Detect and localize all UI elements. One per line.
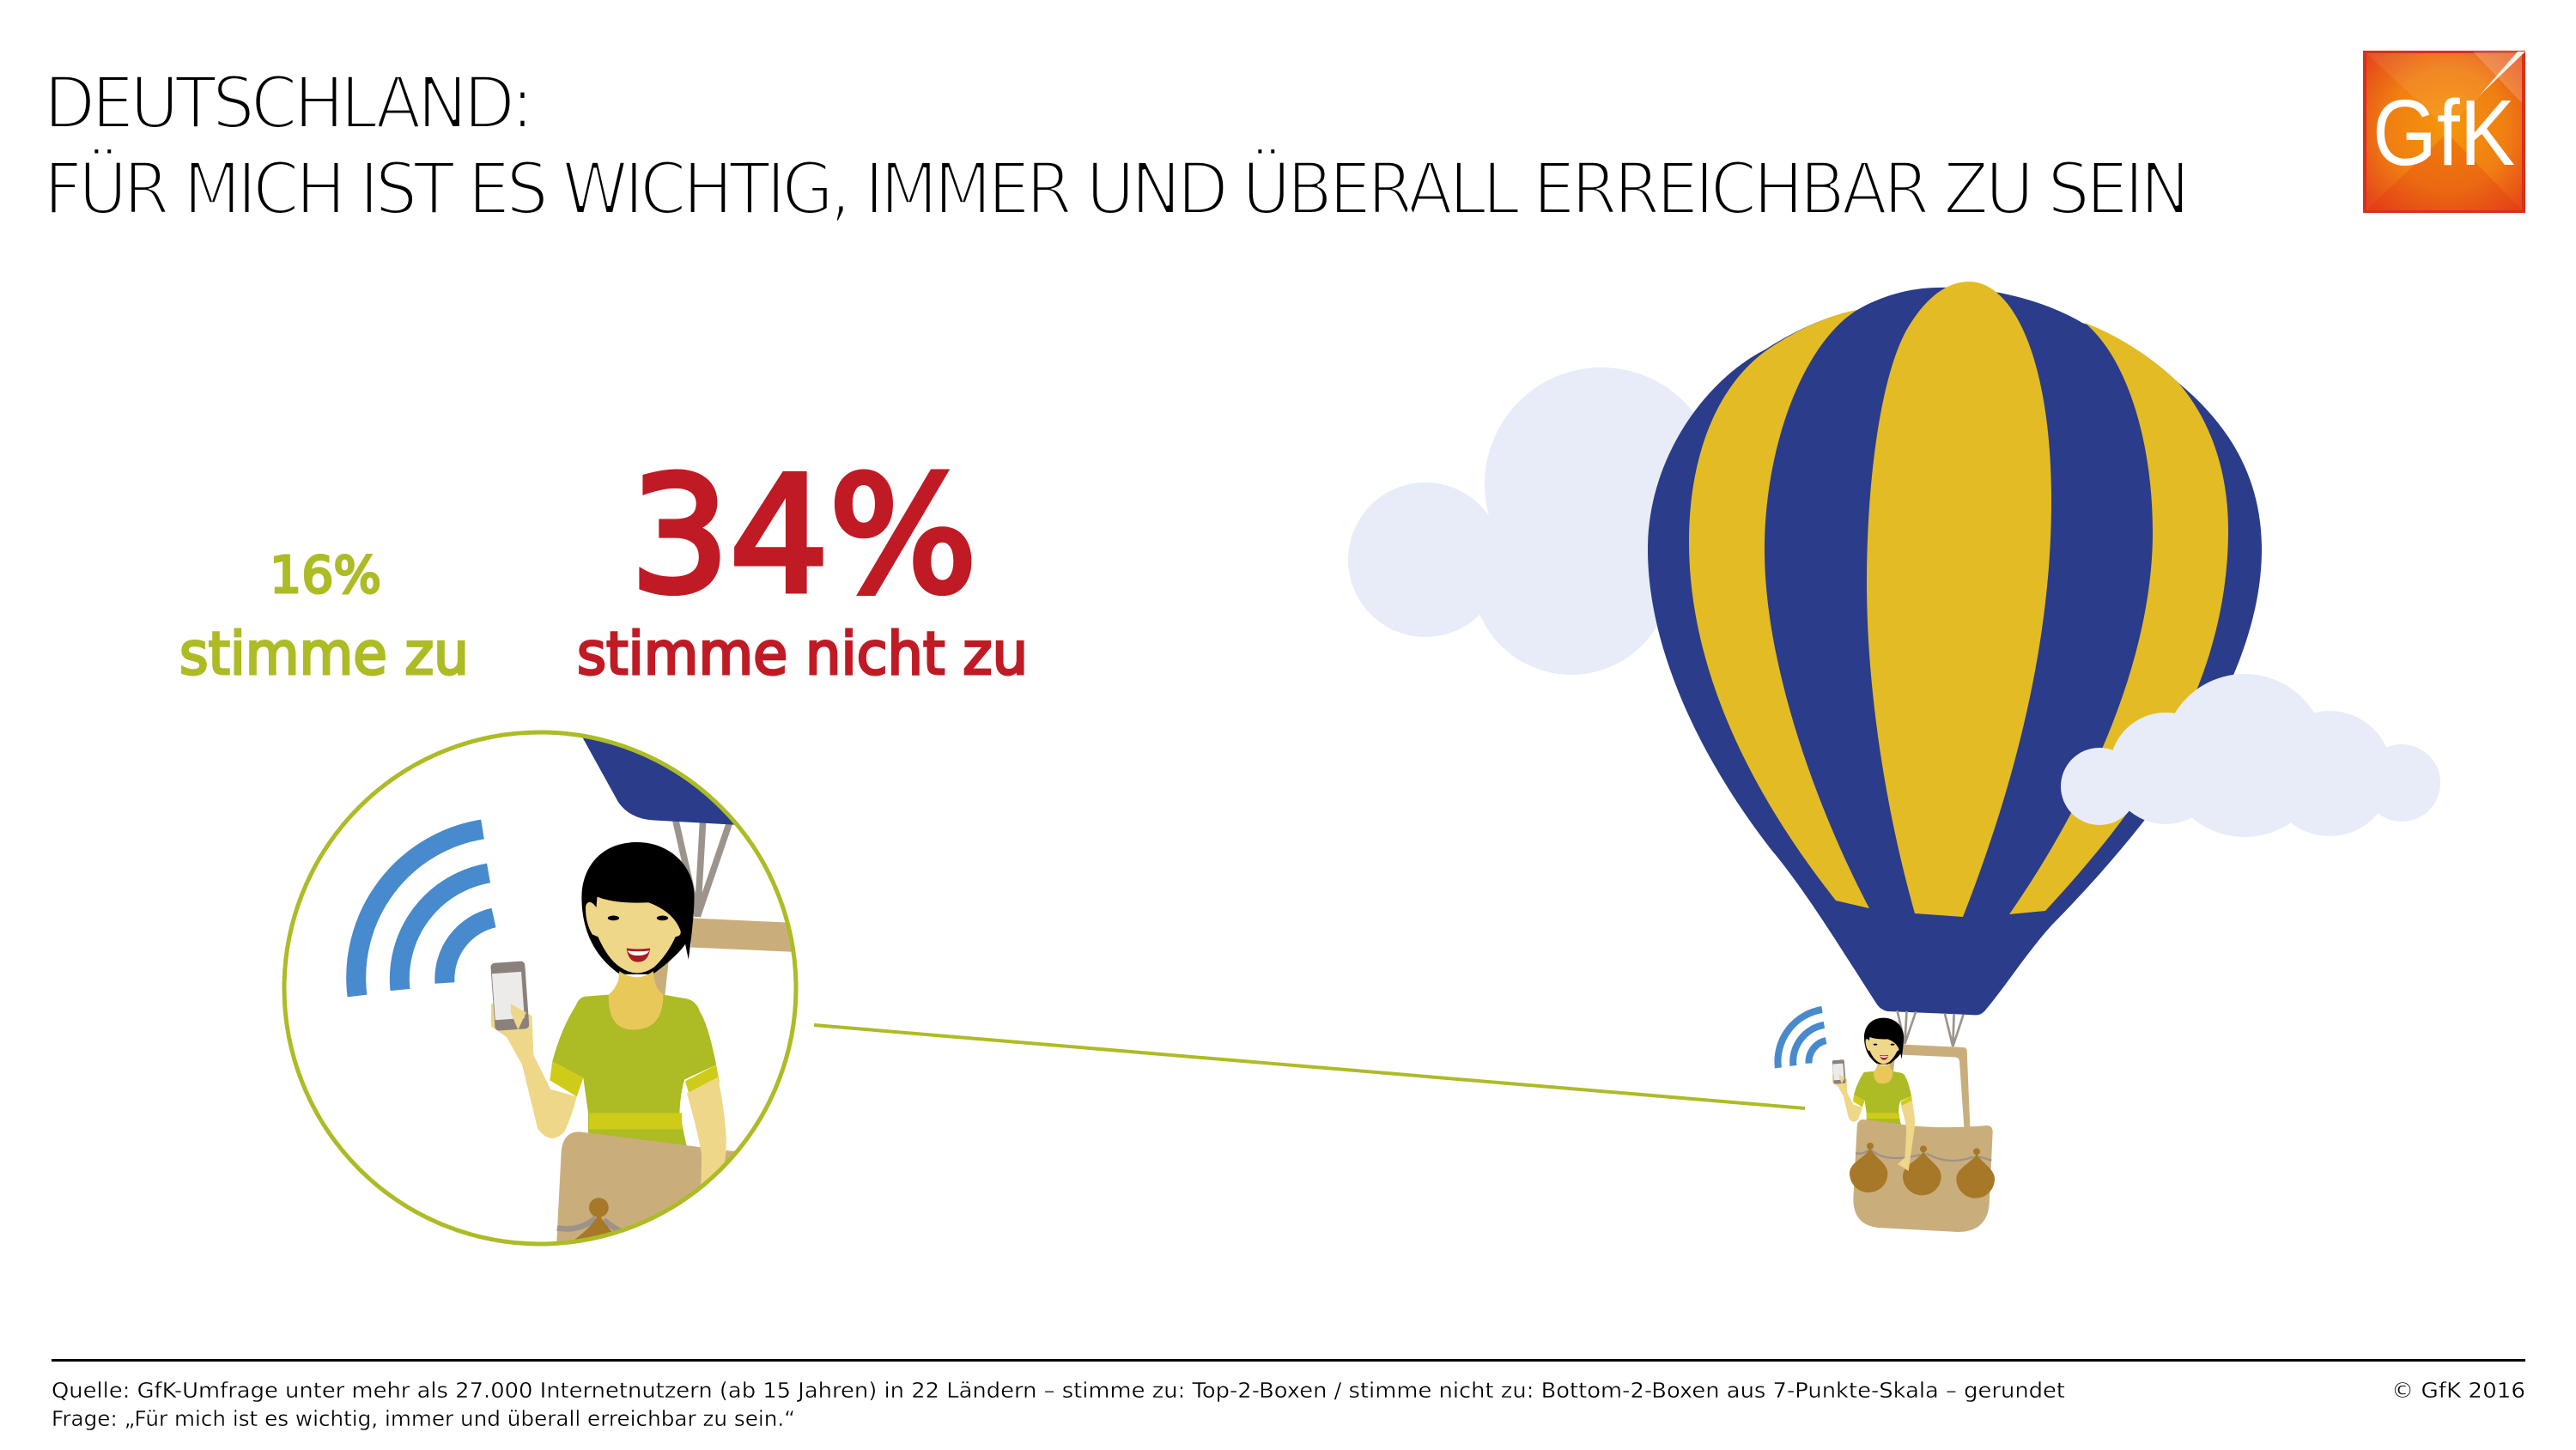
- hot air balloon: [1648, 282, 2262, 1015]
- balloon stripe: right: [2009, 323, 2228, 914]
- balloon stripe: left: [1689, 310, 1869, 908]
- title: FÜR MICH IST ES WICHTIG, IMMER UND ÜBERALL ERREICHBAR ZU SEIN: [44, 147, 2186, 231]
- icon: small wifi: [1777, 1010, 1826, 1068]
- title: [44, 61, 2186, 231]
- stat: 16% stimme zu: stimme zu: [179, 620, 469, 689]
- footer source: Quelle: GfK-Umfrage unter mehr als 27.000 Internetnutzern (ab 15 Jahren) in 22 Ländern – stimme zu: Top-2-Boxen / stimme nicht zu: Bottom-2-Boxen aus 7-Punkte-Skala – gerundet: [52, 1378, 2065, 1403]
- connector line: [814, 1025, 1805, 1108]
- stat: 34% stimme nicht zu: 34%: [630, 442, 977, 628]
- balloon envelope: [1648, 288, 2262, 1015]
- cloud: left: [1348, 367, 1718, 675]
- small woman in basket: [1832, 950, 2029, 1232]
- stat: 16% stimme zu: [179, 545, 469, 689]
- stat: 34% stimme nicht zu: stimme nicht zu: [577, 620, 1028, 689]
- magnified circle: [282, 730, 799, 1247]
- logo: GfK: GfK: [2372, 81, 2515, 185]
- title: DEUTSCHLAND:: [44, 61, 530, 145]
- cloud: right: [2061, 674, 2440, 837]
- stat: 34% stimme nicht zu: [577, 442, 1028, 689]
- icon: wifi signal: [356, 829, 494, 996]
- footer source: Frage: „Für mich ist es wichtig, immer und überall erreichbar zu sein.“: [52, 1406, 795, 1431]
- copyright: © GfK 2016: [2391, 1378, 2525, 1403]
- stat: 16% stimme zu: 16%: [270, 545, 381, 604]
- balloon stripe: centre: [1867, 282, 2051, 917]
- logo: GfK: [2363, 51, 2525, 213]
- footer rule: [52, 1359, 2525, 1362]
- footer source: [52, 1378, 2065, 1431]
- woman with smartphone, magnified: [491, 738, 792, 1241]
